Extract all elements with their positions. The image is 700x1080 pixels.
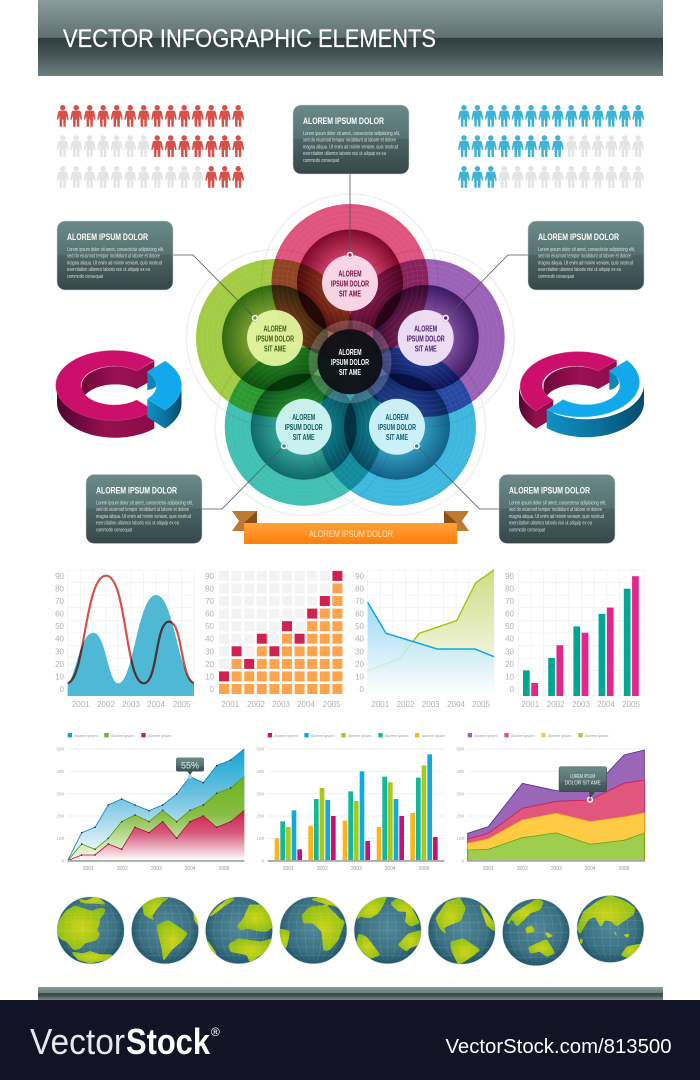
chart: blue area and red curve: 2005 xyxy=(173,700,191,709)
chart: green and blue lines with area fill: 20 xyxy=(355,660,365,669)
chart: stacked area with 55% tooltip: 300 xyxy=(56,791,64,796)
chart: blue area and red curve: 60 xyxy=(55,610,65,619)
chart: square unit grid: 10 xyxy=(205,672,215,681)
chart: paired bars: 50 xyxy=(505,622,515,631)
venn node: green xyxy=(247,310,303,366)
chart: square unit grid: 30 xyxy=(205,647,215,656)
chart: paired bars xyxy=(505,570,645,709)
callout: left: magna aliqua. Ut enim ad minim veniam, quis nostrud xyxy=(67,260,162,266)
venn node: green: IPSUM DOLOR xyxy=(256,334,294,344)
venn node: blue: SIT AME xyxy=(386,433,408,442)
chart: square unit grid: 80 xyxy=(205,584,215,594)
callout: top: magna aliqua. Ut enim ad minim veniam, quis nostrud xyxy=(303,144,398,150)
venn node: purple: ALOREM xyxy=(414,324,437,334)
chart: paired bars: 2004 xyxy=(597,700,615,709)
callout: right: sed do eiusmod tempor incididunt ut labore et dolore xyxy=(538,254,631,260)
venn node: purple: IPSUM DOLOR xyxy=(407,334,445,344)
callout: top: commodo consequat xyxy=(303,158,339,164)
chart: green and blue lines with area fill: 2002 xyxy=(397,700,415,709)
pictogram: blue people rows xyxy=(458,105,644,188)
chart: grouped bars: 2002 xyxy=(317,866,328,872)
image id: VectorStock.com/813500 xyxy=(446,1036,672,1058)
venn node: pink: ALOREM xyxy=(338,270,362,278)
callout: right: magna aliqua. Ut enim ad minim veniam, quis nostrud xyxy=(538,260,633,266)
callout: top: exercitation ullamco laboris nisi ut aliquip ex ea xyxy=(303,151,386,157)
chart: layered area with tooltip: Alorem ipsum xyxy=(474,733,498,738)
chart: blue area and red curve: 2004 xyxy=(147,700,165,709)
chart: green and blue lines with area fill: 2003 xyxy=(422,700,440,709)
globes row xyxy=(57,895,644,966)
venn node: black centre xyxy=(308,320,392,403)
chart: stacked area with 55% tooltip: 100 xyxy=(56,836,64,841)
chart: square unit grid: 0 xyxy=(210,685,215,694)
venn diagram: five overlapping circles xyxy=(186,194,514,515)
chart: blue area and red curve: 80 xyxy=(55,584,65,594)
chart: stacked area with 55% tooltip: 400 xyxy=(56,769,64,774)
callout: left xyxy=(57,221,173,290)
globe 4: Africa xyxy=(279,897,347,964)
chart: grouped bars: 2001 xyxy=(283,866,294,872)
title: VECTOR INFOGRAPHIC ELEMENTS xyxy=(63,25,436,53)
chart: green and blue lines with area fill: 10 xyxy=(355,672,365,681)
chart: grouped bars: 300 xyxy=(256,791,264,796)
chart: green and blue lines with area fill: 70 xyxy=(355,597,365,606)
chart: grouped bars: 500 xyxy=(256,747,264,752)
chart: blue area and red curve: 40 xyxy=(55,635,65,644)
tooltip: lorem ipsum: LOREM IPSUM xyxy=(570,774,595,780)
ribbon banner: ALOREM IPSUM DOLOR xyxy=(309,529,393,540)
chart: paired bars: 2003 xyxy=(572,700,590,709)
venn node: blue: ALOREM xyxy=(386,413,409,422)
callout: bottom right: magna aliqua. Ut enim ad minim veniam, quis nostrud xyxy=(509,514,604,520)
callout: bottom right: ALOREM IPSUM DOLOR xyxy=(509,486,590,496)
chart: grouped bars: 400 xyxy=(256,769,264,774)
callout: bottom left: ALOREM IPSUM DOLOR xyxy=(96,486,177,496)
venn node: blue: IPSUM DOLOR xyxy=(378,423,416,432)
callout: left: commodo consequat xyxy=(67,274,103,280)
chart: green and blue lines with area fill: 50 xyxy=(355,622,365,631)
chart: paired bars: 20 xyxy=(505,660,515,669)
chart: stacked area with 55% tooltip: Alorem ipsum xyxy=(74,733,98,738)
chart: layered area with tooltip: 200 xyxy=(456,814,464,819)
chart: green and blue lines with area fill: 2001 xyxy=(371,700,390,709)
chart: green and blue lines with area fill: 2005 xyxy=(472,700,490,709)
chart: stacked area with 55% tooltip: 0 xyxy=(61,858,64,863)
tooltip: 55%: 55% xyxy=(181,760,200,772)
tooltip: 55% xyxy=(176,758,204,779)
pictogram: red people rows xyxy=(57,105,244,188)
venn node: black centre: ALOREM xyxy=(338,348,362,357)
chart: grouped bars: 200 xyxy=(256,814,264,819)
chart: paired bars: 2001 xyxy=(521,700,540,709)
callout: bottom right: exercitation ullamco laboris nisi ut aliquip ex ea xyxy=(509,521,592,527)
venn node: pink: SIT AME xyxy=(339,290,361,298)
chart: blue area and red curve: 2001 xyxy=(72,700,90,709)
ribbon banner xyxy=(232,511,469,544)
chart: square unit grid: 2003 xyxy=(272,700,290,709)
callout: bottom right: commodo consequat xyxy=(509,528,545,534)
chart: layered area with tooltip: 100 xyxy=(456,836,464,841)
chart: layered area with tooltip: 2005 xyxy=(618,866,630,872)
chart: layered area with tooltip: 2003 xyxy=(551,866,562,872)
globe 7: Australia xyxy=(502,899,570,966)
chart: square unit grid: 2002 xyxy=(247,700,265,709)
chart: grouped bars xyxy=(256,733,446,872)
chart: layered area with tooltip xyxy=(456,733,644,872)
chart: layered area with tooltip: 0 xyxy=(461,858,464,863)
globe 8: South Asia xyxy=(577,895,644,963)
chart: green and blue lines with area fill: 0 xyxy=(360,685,365,694)
chart: blue area and red curve: 30 xyxy=(55,647,65,656)
chart: paired bars: 70 xyxy=(505,597,515,606)
chart: green and blue lines with area fill xyxy=(355,570,494,709)
chart: layered area with tooltip: Alorem ipsum xyxy=(511,733,535,738)
chart: green and blue lines with area fill: 40 xyxy=(355,635,365,644)
chart: paired bars: 30 xyxy=(505,647,515,656)
chart: layered area with tooltip: Alorem ipsum xyxy=(548,733,572,738)
callout: top: Lorem ipsum dolor sit amet, consectetur adipisicing elit, xyxy=(303,131,400,137)
chart: grouped bars: 2004 xyxy=(384,866,396,872)
chart: layered area with tooltip: 2002 xyxy=(517,866,528,872)
venn node: purple xyxy=(398,310,454,366)
chart: layered area with tooltip: 2001 xyxy=(483,866,494,872)
tooltip: lorem ipsum: DOLOR SIT AME xyxy=(565,781,601,787)
chart: stacked area with 55% tooltip: 500 xyxy=(56,747,64,752)
chart: paired bars: 90 xyxy=(505,572,515,581)
callout: left: ALOREM IPSUM DOLOR xyxy=(67,232,148,243)
callout: bottom left: commodo consequat xyxy=(96,528,132,534)
tooltip: lorem ipsum xyxy=(559,767,607,802)
chart: square unit grid xyxy=(205,571,342,709)
callout: bottom left xyxy=(86,474,202,544)
chart: paired bars: 80 xyxy=(505,584,515,594)
chart: grouped bars: Alorem ipsum xyxy=(311,733,335,738)
globe 6: North America xyxy=(428,897,496,965)
chart: paired bars: 10 xyxy=(505,672,515,681)
callout: top: ALOREM IPSUM DOLOR xyxy=(303,116,384,127)
chart: grouped bars: Alorem ipsum xyxy=(348,733,372,738)
chart: stacked area with 55% tooltip: Alorem ipsum xyxy=(111,733,135,738)
chart: square unit grid: 70 xyxy=(205,597,215,606)
chart: stacked area with 55% tooltip: 2005 xyxy=(218,866,230,872)
chart: grouped bars: Alorem ipsum xyxy=(422,733,446,738)
globe 3: Europe and Africa xyxy=(205,897,274,964)
callout: left: sed do eiusmod tempor incididunt ut labore et dolore xyxy=(67,254,160,260)
chart: square unit grid: 2001 xyxy=(221,700,240,709)
chart: blue area and red curve: 70 xyxy=(55,597,65,606)
chart: layered area with tooltip: 2004 xyxy=(584,866,596,872)
chart: square unit grid: 40 xyxy=(205,635,215,644)
venn node: green: SIT AME xyxy=(264,344,286,354)
callout: left: exercitation ullamco laboris nisi ut aliquip ex ea xyxy=(67,267,150,273)
callout: right xyxy=(528,221,644,290)
callout: top xyxy=(293,105,409,174)
chart: layered area with tooltip: 500 xyxy=(456,747,464,752)
chart: square unit grid: 90 xyxy=(205,572,215,581)
chart: grouped bars: Alorem ipsum xyxy=(274,733,298,738)
chart: square unit grid: 50 xyxy=(205,622,215,631)
3D ring: right xyxy=(519,352,644,437)
chart: green and blue lines with area fill: 90 xyxy=(355,572,365,581)
chart: green and blue lines with area fill: 2004 xyxy=(447,700,465,709)
chart: square unit grid: 2004 xyxy=(297,700,315,709)
callout: bottom left: magna aliqua. Ut enim ad minim veniam, quis nostrud xyxy=(96,514,191,520)
callout: bottom right: Lorem ipsum dolor sit amet, consectetur adipisicing elit, xyxy=(509,500,606,506)
globe 1: Asia xyxy=(57,896,124,964)
callout: left: Lorem ipsum dolor sit amet, consectetur adipisicing elit, xyxy=(67,247,164,253)
chart: stacked area with 55% tooltip: 200 xyxy=(56,814,64,819)
chart: blue area and red curve: 20 xyxy=(55,660,65,669)
3D ring: left xyxy=(56,351,182,438)
venn node: teal: SIT AME xyxy=(293,433,315,442)
chart: green and blue lines with area fill: 60 xyxy=(355,610,365,619)
chart: square unit grid: 20 xyxy=(205,660,215,669)
chart: blue area and red curve: 2003 xyxy=(122,700,140,709)
callout: bottom right: sed do eiusmod tempor incididunt ut labore et dolore xyxy=(509,507,602,513)
footer strip xyxy=(38,987,663,1000)
globe 5: Atlantic xyxy=(354,897,422,964)
chart: grouped bars: 2005 xyxy=(418,866,430,872)
watermark bar: Stock xyxy=(126,1021,211,1062)
chart: grouped bars: 2003 xyxy=(351,866,362,872)
watermark bar: ® xyxy=(211,1025,220,1039)
chart: grouped bars: 100 xyxy=(256,836,264,841)
chart: paired bars: 40 xyxy=(505,635,515,644)
chart: square unit grid: 2005 xyxy=(323,700,341,709)
chart: blue area and red curve: 10 xyxy=(55,672,65,681)
callout: top: sed do eiusmod tempor incididunt ut labore et dolore xyxy=(303,138,396,144)
chart: green and blue lines with area fill: 30 xyxy=(355,647,365,656)
logo: Vector xyxy=(30,1021,125,1062)
chart: grouped bars: Alorem ipsum xyxy=(385,733,409,738)
chart: paired bars: 60 xyxy=(505,610,515,619)
callout: bottom right xyxy=(499,474,615,544)
connector lines with dots xyxy=(173,174,528,509)
venn node: teal: ALOREM xyxy=(292,413,315,422)
venn node: teal: IPSUM DOLOR xyxy=(285,423,323,432)
venn node: black centre: SIT AME xyxy=(339,368,361,377)
chart: stacked area with 55% tooltip: 2002 xyxy=(117,866,128,872)
chart: blue area and red curve: 90 xyxy=(55,572,65,581)
chart: square unit grid: 60 xyxy=(205,610,215,619)
chart: paired bars: 2005 xyxy=(622,700,640,709)
watermark bar xyxy=(0,1000,700,1080)
callout: bottom left: Lorem ipsum dolor sit amet, consectetur adipisicing elit, xyxy=(96,500,193,506)
chart: layered area with tooltip: 300 xyxy=(456,791,464,796)
chart: stacked area with 55% tooltip xyxy=(56,733,244,872)
chart: layered area with tooltip: Alorem ipsum xyxy=(585,733,609,738)
callout: right: commodo consequat xyxy=(538,274,574,280)
venn node: blue xyxy=(369,399,425,455)
chart: green and blue lines with area fill: 80 xyxy=(355,584,365,594)
venn node: pink: IPSUM DOLOR xyxy=(331,280,369,288)
venn node: green: ALOREM xyxy=(264,324,287,334)
callout: bottom left: sed do eiusmod tempor incididunt ut labore et dolore xyxy=(96,507,189,513)
venn node: pink xyxy=(322,255,378,311)
chart: blue area and red curve: 50 xyxy=(55,622,65,631)
chart: stacked area with 55% tooltip: Alorem ipsum xyxy=(148,733,172,738)
chart: stacked area with 55% tooltip: 2001 xyxy=(83,866,94,872)
chart: blue area and red curve: 2002 xyxy=(97,700,115,709)
globe 2: South America xyxy=(131,897,199,964)
venn node: teal xyxy=(276,399,332,455)
chart: stacked area with 55% tooltip: 2003 xyxy=(151,866,162,872)
chart: paired bars: 0 xyxy=(510,685,515,694)
callout: right: ALOREM IPSUM DOLOR xyxy=(538,232,619,243)
chart: grouped bars: 0 xyxy=(261,858,264,863)
callout: right: Lorem ipsum dolor sit amet, consectetur adipisicing elit, xyxy=(538,247,635,253)
header banner xyxy=(38,0,663,76)
chart: stacked area with 55% tooltip: 2004 xyxy=(184,866,196,872)
venn node: black centre: IPSUM DOLOR xyxy=(331,358,369,367)
chart: layered area with tooltip: 400 xyxy=(456,769,464,774)
chart: blue area and red curve: 0 xyxy=(60,685,65,694)
venn node: purple: SIT AME xyxy=(415,344,437,354)
callout: right: exercitation ullamco laboris nisi ut aliquip ex ea xyxy=(538,267,621,273)
callout: bottom left: exercitation ullamco laboris nisi ut aliquip ex ea xyxy=(96,521,179,527)
chart: blue area and red curve xyxy=(55,570,194,709)
chart: paired bars: 2002 xyxy=(547,700,565,709)
